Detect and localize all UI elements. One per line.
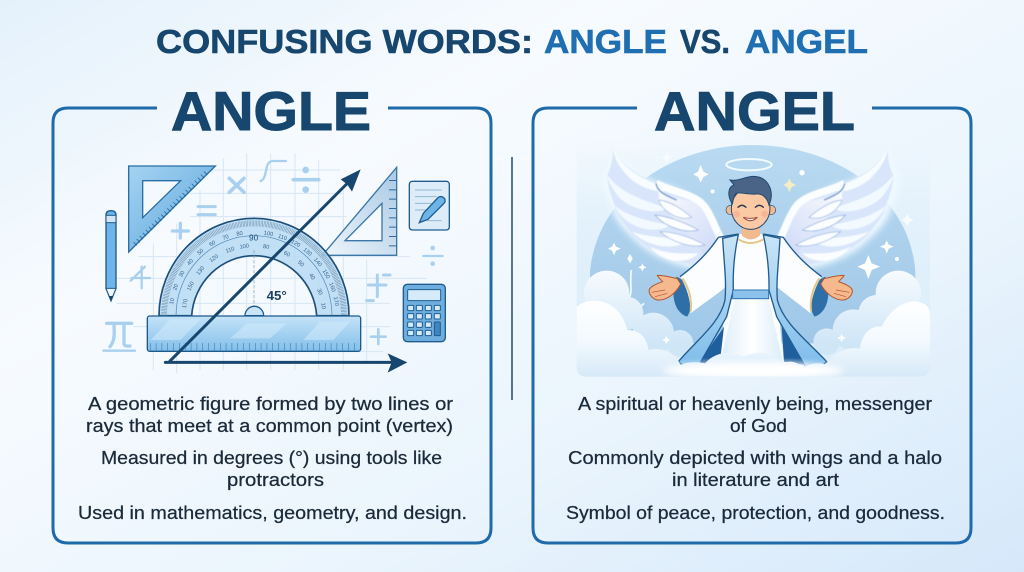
protractor: 100 <box>263 230 274 238</box>
clouds: back <box>584 271 921 357</box>
arrow: diagonal ray <box>169 169 361 362</box>
protractor: 150 <box>186 281 196 292</box>
protractor: 80 <box>262 244 270 251</box>
icon: calculator <box>403 284 445 342</box>
protractor: 110 <box>225 246 236 255</box>
protractor: 50 <box>197 248 205 257</box>
star: gold <box>783 178 796 192</box>
protractor: 10 <box>169 298 176 305</box>
protractor: 130 <box>302 247 313 258</box>
hand: right <box>821 275 852 300</box>
clouds: front <box>577 301 930 377</box>
angle label: 45° <box>267 288 287 303</box>
icon: pencil <box>106 211 116 301</box>
panel border: angle <box>53 108 491 543</box>
protractor: 90 <box>249 233 259 243</box>
protractor: 100 <box>239 243 249 251</box>
cloud sparkles <box>662 334 846 344</box>
protractor: 40 <box>186 258 195 267</box>
protractor: 60 <box>208 240 217 248</box>
protractor: 120 <box>290 239 301 249</box>
title: VS. <box>680 23 730 60</box>
protractor: 20 <box>172 283 180 291</box>
definition text: angle: Used in mathematics, geometry, and design. <box>78 503 467 523</box>
robe: arm outlines <box>680 234 822 277</box>
title: CONFUSING WORDS: <box>156 23 533 60</box>
protractor: 80 <box>236 231 243 238</box>
protractor: 170 <box>332 296 339 306</box>
arrow: horizontal ray <box>165 353 407 373</box>
wing glow <box>603 143 720 270</box>
wing: left <box>607 147 721 267</box>
definition text: angel: of God <box>730 416 787 436</box>
cloud base: center <box>663 362 843 379</box>
heading: ANGEL: ANGEL <box>654 80 855 142</box>
protractor: 160 <box>327 282 336 293</box>
protractor: 30 <box>178 270 187 279</box>
sleeve linings <box>673 277 700 317</box>
definition text: angle: protractors <box>227 470 324 490</box>
halo <box>726 159 772 170</box>
robe: arms and body <box>680 234 822 363</box>
math symbols <box>103 161 443 351</box>
definition text: angle: Measured in degrees (°) using tools like <box>101 448 442 468</box>
sky dome <box>590 145 915 343</box>
hand: left <box>649 275 681 300</box>
heading: ANGLE: ANGLE <box>171 80 371 142</box>
math background grid <box>117 153 427 373</box>
neck <box>742 225 760 239</box>
belt <box>733 290 769 299</box>
illustration: geometry tools <box>103 153 449 373</box>
illustration: angel <box>577 140 930 379</box>
stole: right <box>763 235 827 366</box>
collar <box>738 239 763 243</box>
icon: notepad with pencil <box>409 181 449 230</box>
definition text: angel: Symbol of peace, protection, and goodness. <box>566 503 945 523</box>
squiggle <box>628 270 644 307</box>
ruler base <box>147 306 361 351</box>
protractor: 140 <box>312 257 323 268</box>
protractor <box>159 218 349 316</box>
definition text: angle <box>78 394 467 523</box>
set square: blue <box>129 166 215 252</box>
panel: angel <box>533 80 971 543</box>
protractor: 30 <box>315 288 323 296</box>
title: ANGLE <box>544 23 667 60</box>
panel border: angel <box>533 108 971 543</box>
protractor: 130 <box>196 266 206 277</box>
definition text: angel <box>566 394 945 523</box>
sparkles <box>608 153 913 279</box>
protractor: 110 <box>277 234 288 242</box>
definition text: angel: Commonly depicted with wings and a halo <box>568 448 942 468</box>
panel: angle <box>53 80 491 543</box>
center divider <box>511 157 513 400</box>
face <box>738 205 763 207</box>
set square: pale <box>322 167 397 255</box>
illustration backdrop <box>577 140 930 377</box>
definition text: angle: A geometric figure formed by two lines or <box>88 394 453 414</box>
protractor: 10 <box>319 302 326 310</box>
definition text: angle: rays that meet at a common point (vertex) <box>86 416 453 436</box>
protractor: 170 <box>182 298 189 309</box>
sleeve cuffs <box>682 278 691 312</box>
protractor: 150 <box>321 269 331 280</box>
skirt <box>720 298 783 363</box>
head <box>726 176 776 229</box>
title <box>156 23 868 60</box>
definition text: angel: in literature and art <box>672 470 839 490</box>
wing glow: right <box>783 143 900 270</box>
protractor: 50 <box>296 260 305 268</box>
hair <box>729 176 771 205</box>
definition text: angel: A spiritual or heavenly being, messenger <box>578 394 932 414</box>
title: ANGEL <box>745 23 868 60</box>
wing: right <box>780 147 893 267</box>
stole: left <box>678 235 738 366</box>
protractor: 40 <box>307 273 316 281</box>
protractor: 60 <box>282 250 291 259</box>
protractor: 120 <box>209 254 220 264</box>
protractor: 70 <box>222 234 230 242</box>
